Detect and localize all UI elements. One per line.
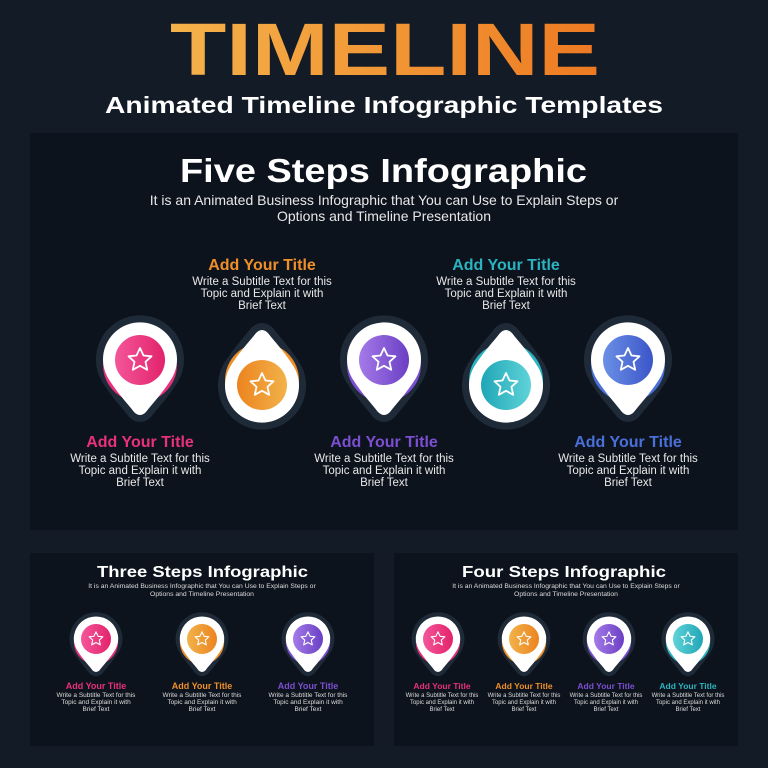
text: step 2: Brief Text	[238, 300, 287, 312]
text: step 1: Brief Text	[116, 477, 165, 489]
icon: pin 5 blue	[591, 322, 665, 415]
text: five steps description: Options and Timeline Presentation	[277, 208, 491, 224]
text: step 5	[558, 434, 698, 489]
text: step 4: Add Your Title	[452, 257, 560, 274]
icon: small pin teal	[666, 616, 710, 672]
text: four steps labels: Brief Text	[594, 707, 619, 713]
text: three steps labels: Brief Text	[295, 706, 322, 713]
text: three steps labels: Write a Subtitle Text for this	[57, 692, 135, 699]
subtitle: Animated Timeline Infographic Templates	[105, 92, 663, 118]
text: step 4: Write a Subtitle Text for this	[436, 276, 576, 288]
text: step 3: Write a Subtitle Text for this	[314, 453, 454, 465]
text: step 4: Brief Text	[482, 300, 531, 312]
text: four steps labels: Brief Text	[676, 707, 701, 713]
text: four steps labels: Write a Subtitle Text for this	[406, 693, 478, 699]
text: four steps labels: Brief Text	[512, 707, 537, 713]
text: four steps labels: Add Your Title	[413, 681, 471, 691]
text: step 2: Topic and Explain it with	[201, 288, 323, 300]
icon: pin 2 orange	[225, 330, 299, 423]
text: step 3	[314, 434, 454, 489]
text: four steps labels: Topic and Explain it with	[410, 700, 474, 706]
text: step 1: Topic and Explain it with	[79, 465, 201, 477]
icon: pin 3 purple	[347, 322, 421, 415]
text: four steps labels: Add Your Title	[659, 681, 717, 691]
text: step 5: Write a Subtitle Text for this	[558, 453, 698, 465]
text: four steps labels: Topic and Explain it with	[656, 700, 720, 706]
text: three steps labels: Add Your Title	[66, 681, 126, 691]
text: step 1: Add Your Title	[86, 434, 194, 451]
icon: pin 1 pink	[103, 322, 177, 415]
heading: four steps: Four Steps Infographic	[462, 564, 666, 581]
text: four steps description: It is an Animated Business Infographic that You can Use to Explain Steps or	[452, 583, 680, 590]
text: step 2: Add Your Title	[208, 257, 316, 274]
title: TIMELINE	[170, 8, 600, 91]
text: four steps labels: Topic and Explain it with	[574, 700, 638, 706]
text: step 2: Write a Subtitle Text for this	[192, 276, 332, 288]
text: step 3: Topic and Explain it with	[323, 465, 445, 477]
text: four steps labels	[406, 681, 724, 713]
text: step 3: Brief Text	[360, 477, 409, 489]
text: three steps labels: Brief Text	[83, 706, 110, 713]
text: step 1: Write a Subtitle Text for this	[70, 453, 210, 465]
text: four steps labels: Add Your Title	[577, 681, 635, 691]
text: three steps labels: Write a Subtitle Text for this	[269, 692, 347, 699]
text: step 1	[70, 434, 210, 489]
text: three steps description: Options and Timeline Presentation	[150, 591, 254, 598]
text: four steps description: Options and Timeline Presentation	[514, 591, 618, 598]
text: three steps labels	[57, 681, 348, 713]
text: three steps labels: Add Your Title	[172, 681, 232, 691]
text: step 5: Brief Text	[604, 477, 653, 489]
icon: small pin orange	[502, 616, 546, 672]
text: step 5: Add Your Title	[574, 434, 682, 451]
text: step 4	[436, 257, 576, 312]
text: four steps labels: Write a Subtitle Text for this	[488, 693, 560, 699]
text: step 4: Topic and Explain it with	[445, 288, 567, 300]
icon: small pin pink	[416, 616, 460, 672]
text: three steps labels: Add Your Title	[278, 681, 338, 691]
panel: four steps	[394, 553, 738, 746]
text: three steps labels: Topic and Explain it with	[167, 699, 237, 706]
text: four steps labels: Add Your Title	[495, 681, 553, 691]
text: four steps labels: Write a Subtitle Text for this	[652, 693, 724, 699]
panel: five steps	[30, 133, 738, 530]
heading: three steps: Three Steps Infographic	[97, 564, 308, 581]
text: four steps labels: Brief Text	[430, 707, 455, 713]
text: three steps description: It is an Animated Business Infographic that You can Use to Explain Steps or	[88, 583, 316, 590]
text: four steps labels: Topic and Explain it with	[492, 700, 556, 706]
text: three steps labels: Topic and Explain it with	[61, 699, 131, 706]
icon: pin 4 teal	[469, 330, 543, 423]
heading: five steps: Five Steps Infographic	[180, 152, 587, 189]
text: four steps labels: Write a Subtitle Text for this	[570, 693, 642, 699]
panel: three steps	[30, 553, 374, 746]
icon: small pin pink	[74, 616, 118, 672]
text: three steps labels: Topic and Explain it with	[273, 699, 343, 706]
text: step 3: Add Your Title	[330, 434, 438, 451]
icon: small pin purple	[587, 616, 631, 672]
icon: small pin purple	[286, 616, 330, 672]
text: step 2	[192, 257, 332, 312]
text: step 5: Topic and Explain it with	[567, 465, 689, 477]
icon: small pin orange	[180, 616, 224, 672]
text: three steps labels: Write a Subtitle Text for this	[163, 692, 241, 699]
text: five steps description: It is an Animated Business Infographic that You can Use to Explain Steps or	[150, 192, 618, 208]
text: three steps labels: Brief Text	[189, 706, 216, 713]
